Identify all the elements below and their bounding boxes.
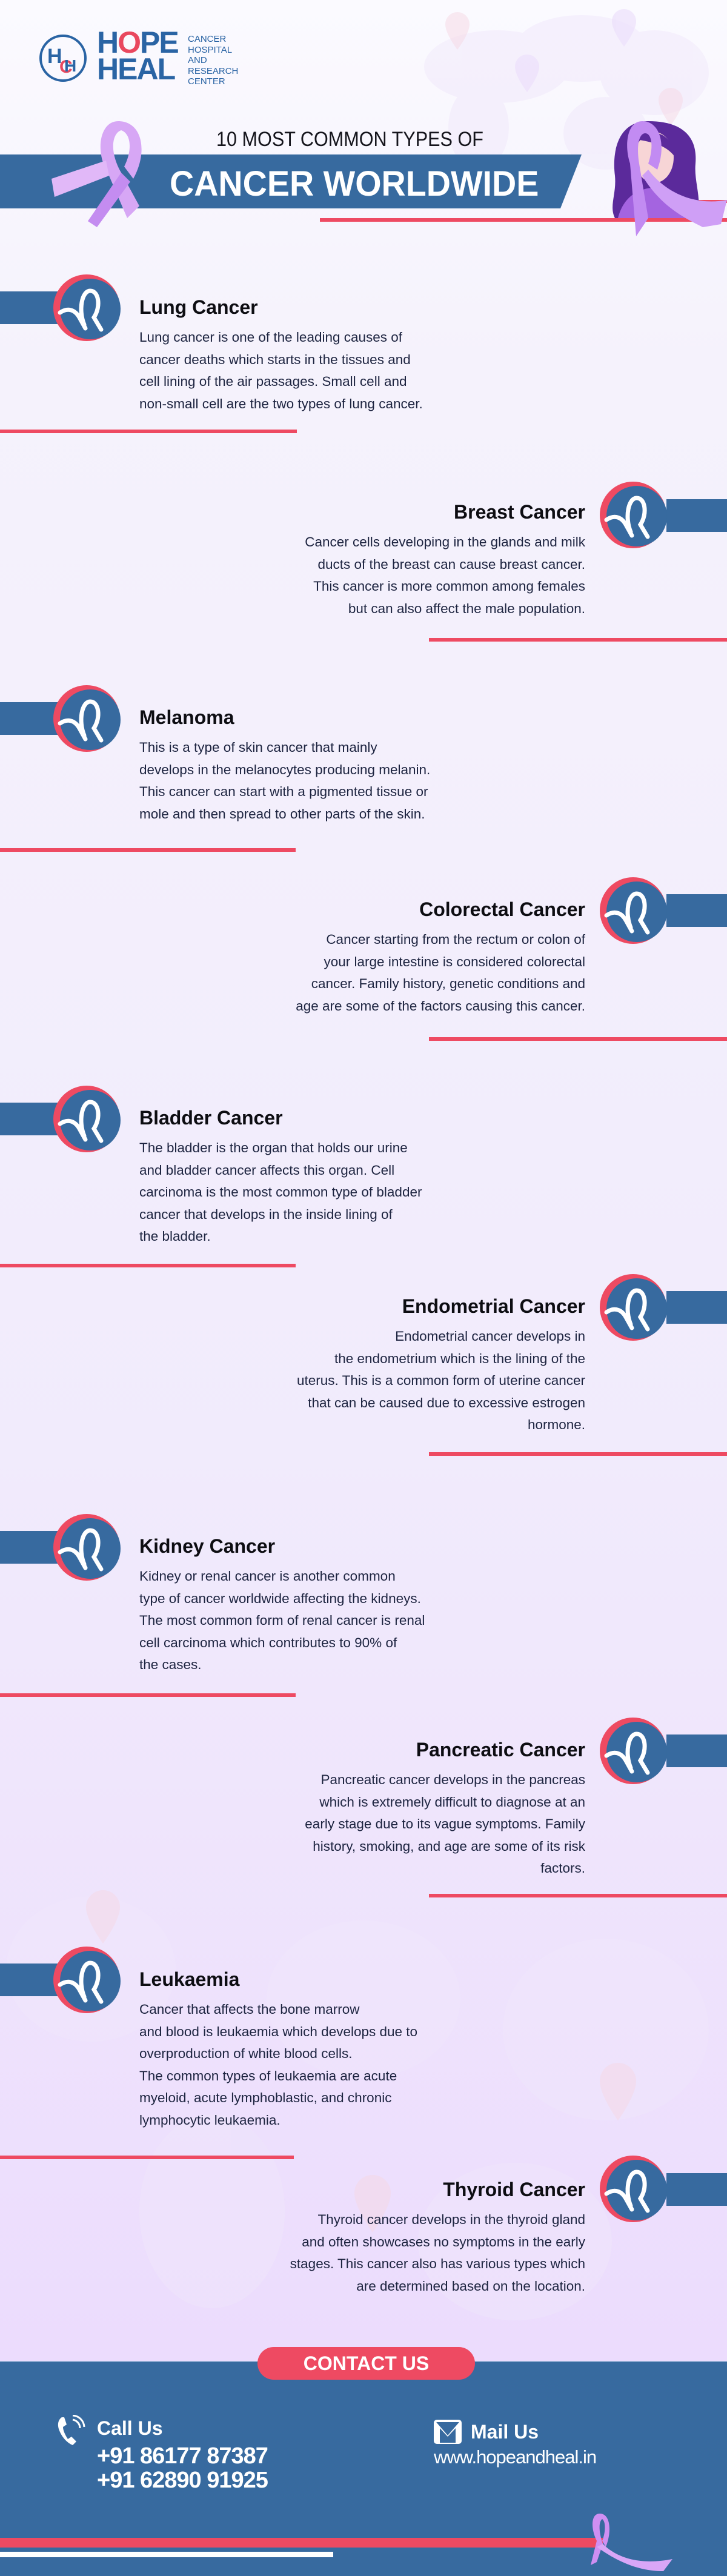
text: The common types of leukaemia are acute	[139, 2068, 397, 2083]
text: Cancer starting from the rectum or colon of	[326, 932, 585, 947]
text	[139, 1569, 425, 1672]
text: are determined based on the location.	[356, 2278, 585, 2294]
text: but can also affect the male population.	[348, 601, 585, 616]
section: Thyroid Cancer	[290, 2156, 727, 2294]
text: and blood is leukaemia which develops due to	[139, 2023, 417, 2039]
subtitle: 10 MOST COMMON TYPES OF	[216, 128, 483, 151]
contact us button: CONTACT US	[304, 2352, 429, 2374]
icon: ribbon circle	[600, 2156, 666, 2222]
text: and bladder cancer affects this organ. Cell	[139, 1162, 394, 1178]
section: Breast Cancer	[305, 482, 727, 642]
text: carcinoma is the most common type of bladder	[139, 1184, 422, 1200]
icon: ribbon circle	[53, 274, 121, 341]
icon: ribbon circle	[600, 1718, 666, 1784]
text: myeloid, acute lymphoblastic, and chronic	[139, 2090, 391, 2105]
text: Lung cancer is one of the leading causes of	[139, 330, 402, 345]
mail us heading: Mail Us	[471, 2421, 539, 2443]
icon: logo emblem: H	[47, 45, 62, 68]
footer: contact	[0, 2347, 727, 2576]
text: the cases.	[139, 1657, 202, 1672]
text: The most common form of renal cancer is renal	[139, 1613, 425, 1628]
section: Lung Cancer	[0, 274, 423, 433]
text	[139, 740, 430, 822]
icon: ribbon circle	[600, 482, 666, 548]
logo subtitle: HOSPITAL	[188, 45, 232, 55]
text: Kidney or renal cancer is another common	[139, 1569, 396, 1584]
website: www.hopeandheal.in	[434, 2446, 596, 2468]
heading: Pancreatic Cancer	[416, 1739, 585, 1761]
heading: Bladder Cancer	[139, 1107, 283, 1129]
heading: Thyroid Cancer	[443, 2179, 585, 2200]
logo wordmark	[97, 25, 178, 86]
banner shape	[0, 154, 727, 222]
text: Cancer cells developing in the glands and milk	[305, 534, 585, 549]
text: hormone.	[528, 1417, 585, 1432]
text	[290, 2212, 585, 2294]
bottom lines	[0, 2538, 603, 2548]
text: mole and then spread to other parts of the skin.	[139, 806, 425, 822]
text	[139, 330, 423, 411]
icon: left purple ribbon	[51, 121, 142, 227]
phone numbers	[97, 2444, 268, 2492]
text: The bladder is the organ that holds our urine	[139, 1140, 408, 1155]
title: CANCER WORLDWIDE	[170, 164, 539, 204]
call us heading: Call Us	[97, 2417, 162, 2439]
text: the bladder.	[139, 1229, 211, 1244]
text: age are some of the factors causing this cancer.	[296, 998, 585, 1013]
text: cancer that develops in the inside lining of	[139, 1207, 393, 1221]
logo	[39, 25, 238, 87]
logo subtitle	[188, 34, 238, 87]
logo subtitle: CANCER	[188, 34, 226, 44]
logo wordmark: HOPE	[97, 25, 178, 59]
icon: woman with ribbon	[612, 121, 727, 236]
text: cell lining of the air passages. Small cell and	[139, 374, 407, 389]
text: This cancer is more common among females	[313, 579, 585, 594]
logo wordmark: HEAL	[97, 52, 174, 86]
icon: phone	[58, 2415, 85, 2445]
icon: logo emblem	[39, 35, 87, 82]
icon: mail	[434, 2420, 462, 2444]
text: overproduction of white blood cells.	[139, 2046, 352, 2061]
text	[305, 534, 585, 616]
text: Cancer that affects the bone marrow	[139, 2002, 360, 2017]
phone numbers: +91 62890 91925	[97, 2468, 268, 2493]
text: cancer. Family history, genetic conditions and	[311, 976, 585, 991]
section: Leukaemia	[0, 1947, 417, 2159]
icon: ribbon circle	[600, 1274, 666, 1341]
text: uterus. This is a common form of uterine cancer	[297, 1373, 585, 1388]
heading: Endometrial Cancer	[402, 1295, 585, 1317]
heading: Melanoma	[139, 706, 234, 728]
icon: ribbon circle	[600, 877, 666, 944]
text	[296, 932, 585, 1013]
text: Pancreatic cancer develops in the pancreas	[320, 1772, 585, 1787]
text	[139, 2002, 417, 2128]
text: history, smoking, and age are some of its risk	[313, 1838, 585, 1854]
text	[305, 1772, 585, 1876]
icon: ribbon circle	[53, 1947, 121, 2013]
logo subtitle: CENTER	[188, 76, 225, 87]
heading: Leukaemia	[139, 1968, 239, 1990]
text: that can be caused due to excessive estrogen	[308, 1395, 585, 1410]
logo subtitle: RESEARCH	[188, 65, 238, 76]
text: ducts of the breast can cause breast cancer.	[317, 556, 585, 572]
text: which is extremely difficult to diagnose at an	[319, 1794, 585, 1809]
section: Endometrial Cancer	[297, 1274, 727, 1456]
text: and often showcases no symptoms in the early	[302, 2234, 585, 2249]
icon: logo emblem: H	[64, 56, 76, 75]
heading: Breast Cancer	[454, 501, 585, 523]
text: develops in the melanocytes producing melanin.	[139, 762, 430, 777]
icon: logo emblem: C	[59, 57, 73, 77]
text: This is a type of skin cancer that mainly	[139, 740, 377, 755]
text: early stage due to its vague symptoms. Family	[305, 1816, 585, 1831]
text: Endometrial cancer develops in	[395, 1329, 585, 1344]
heading: Colorectal Cancer	[419, 898, 585, 920]
text: non-small cell are the two types of lung cancer.	[139, 396, 423, 411]
text: stages. This cancer also has various types which	[290, 2256, 585, 2271]
text: This cancer can start with a pigmented tissue or	[139, 784, 428, 799]
section: Bladder Cancer	[0, 1086, 422, 1267]
icon: footer ribbon	[588, 2511, 679, 2574]
section: Melanoma	[0, 685, 430, 852]
title banner	[0, 121, 727, 236]
text: type of cancer worldwide affecting the kidneys.	[139, 1591, 421, 1605]
logo subtitle: AND	[188, 55, 207, 65]
text: factors.	[540, 1861, 585, 1876]
contact us button	[257, 2347, 475, 2380]
heading: Kidney Cancer	[139, 1535, 275, 1557]
phone numbers: +91 86177 87387	[97, 2443, 268, 2469]
icon: ribbon circle	[53, 1086, 121, 1152]
section: Colorectal Cancer	[296, 877, 727, 1041]
text: cell carcinoma which contributes to 90% of	[139, 1635, 397, 1650]
heading: Lung Cancer	[139, 296, 258, 318]
section: Pancreatic Cancer	[305, 1718, 727, 1897]
text: your large intestine is considered colorectal	[324, 954, 585, 969]
icon: ribbon circle	[53, 685, 121, 752]
text	[139, 1140, 422, 1244]
icon: ribbon circle	[53, 1514, 121, 1581]
text: cancer deaths which starts in the tissues and	[139, 351, 411, 367]
section: Kidney Cancer	[0, 1514, 425, 1697]
text	[297, 1329, 585, 1432]
text: lymphocytic leukaemia.	[139, 2112, 281, 2128]
text: the endometrium which is the lining of the	[334, 1351, 585, 1366]
text: Thyroid cancer develops in the thyroid gland	[317, 2212, 585, 2227]
